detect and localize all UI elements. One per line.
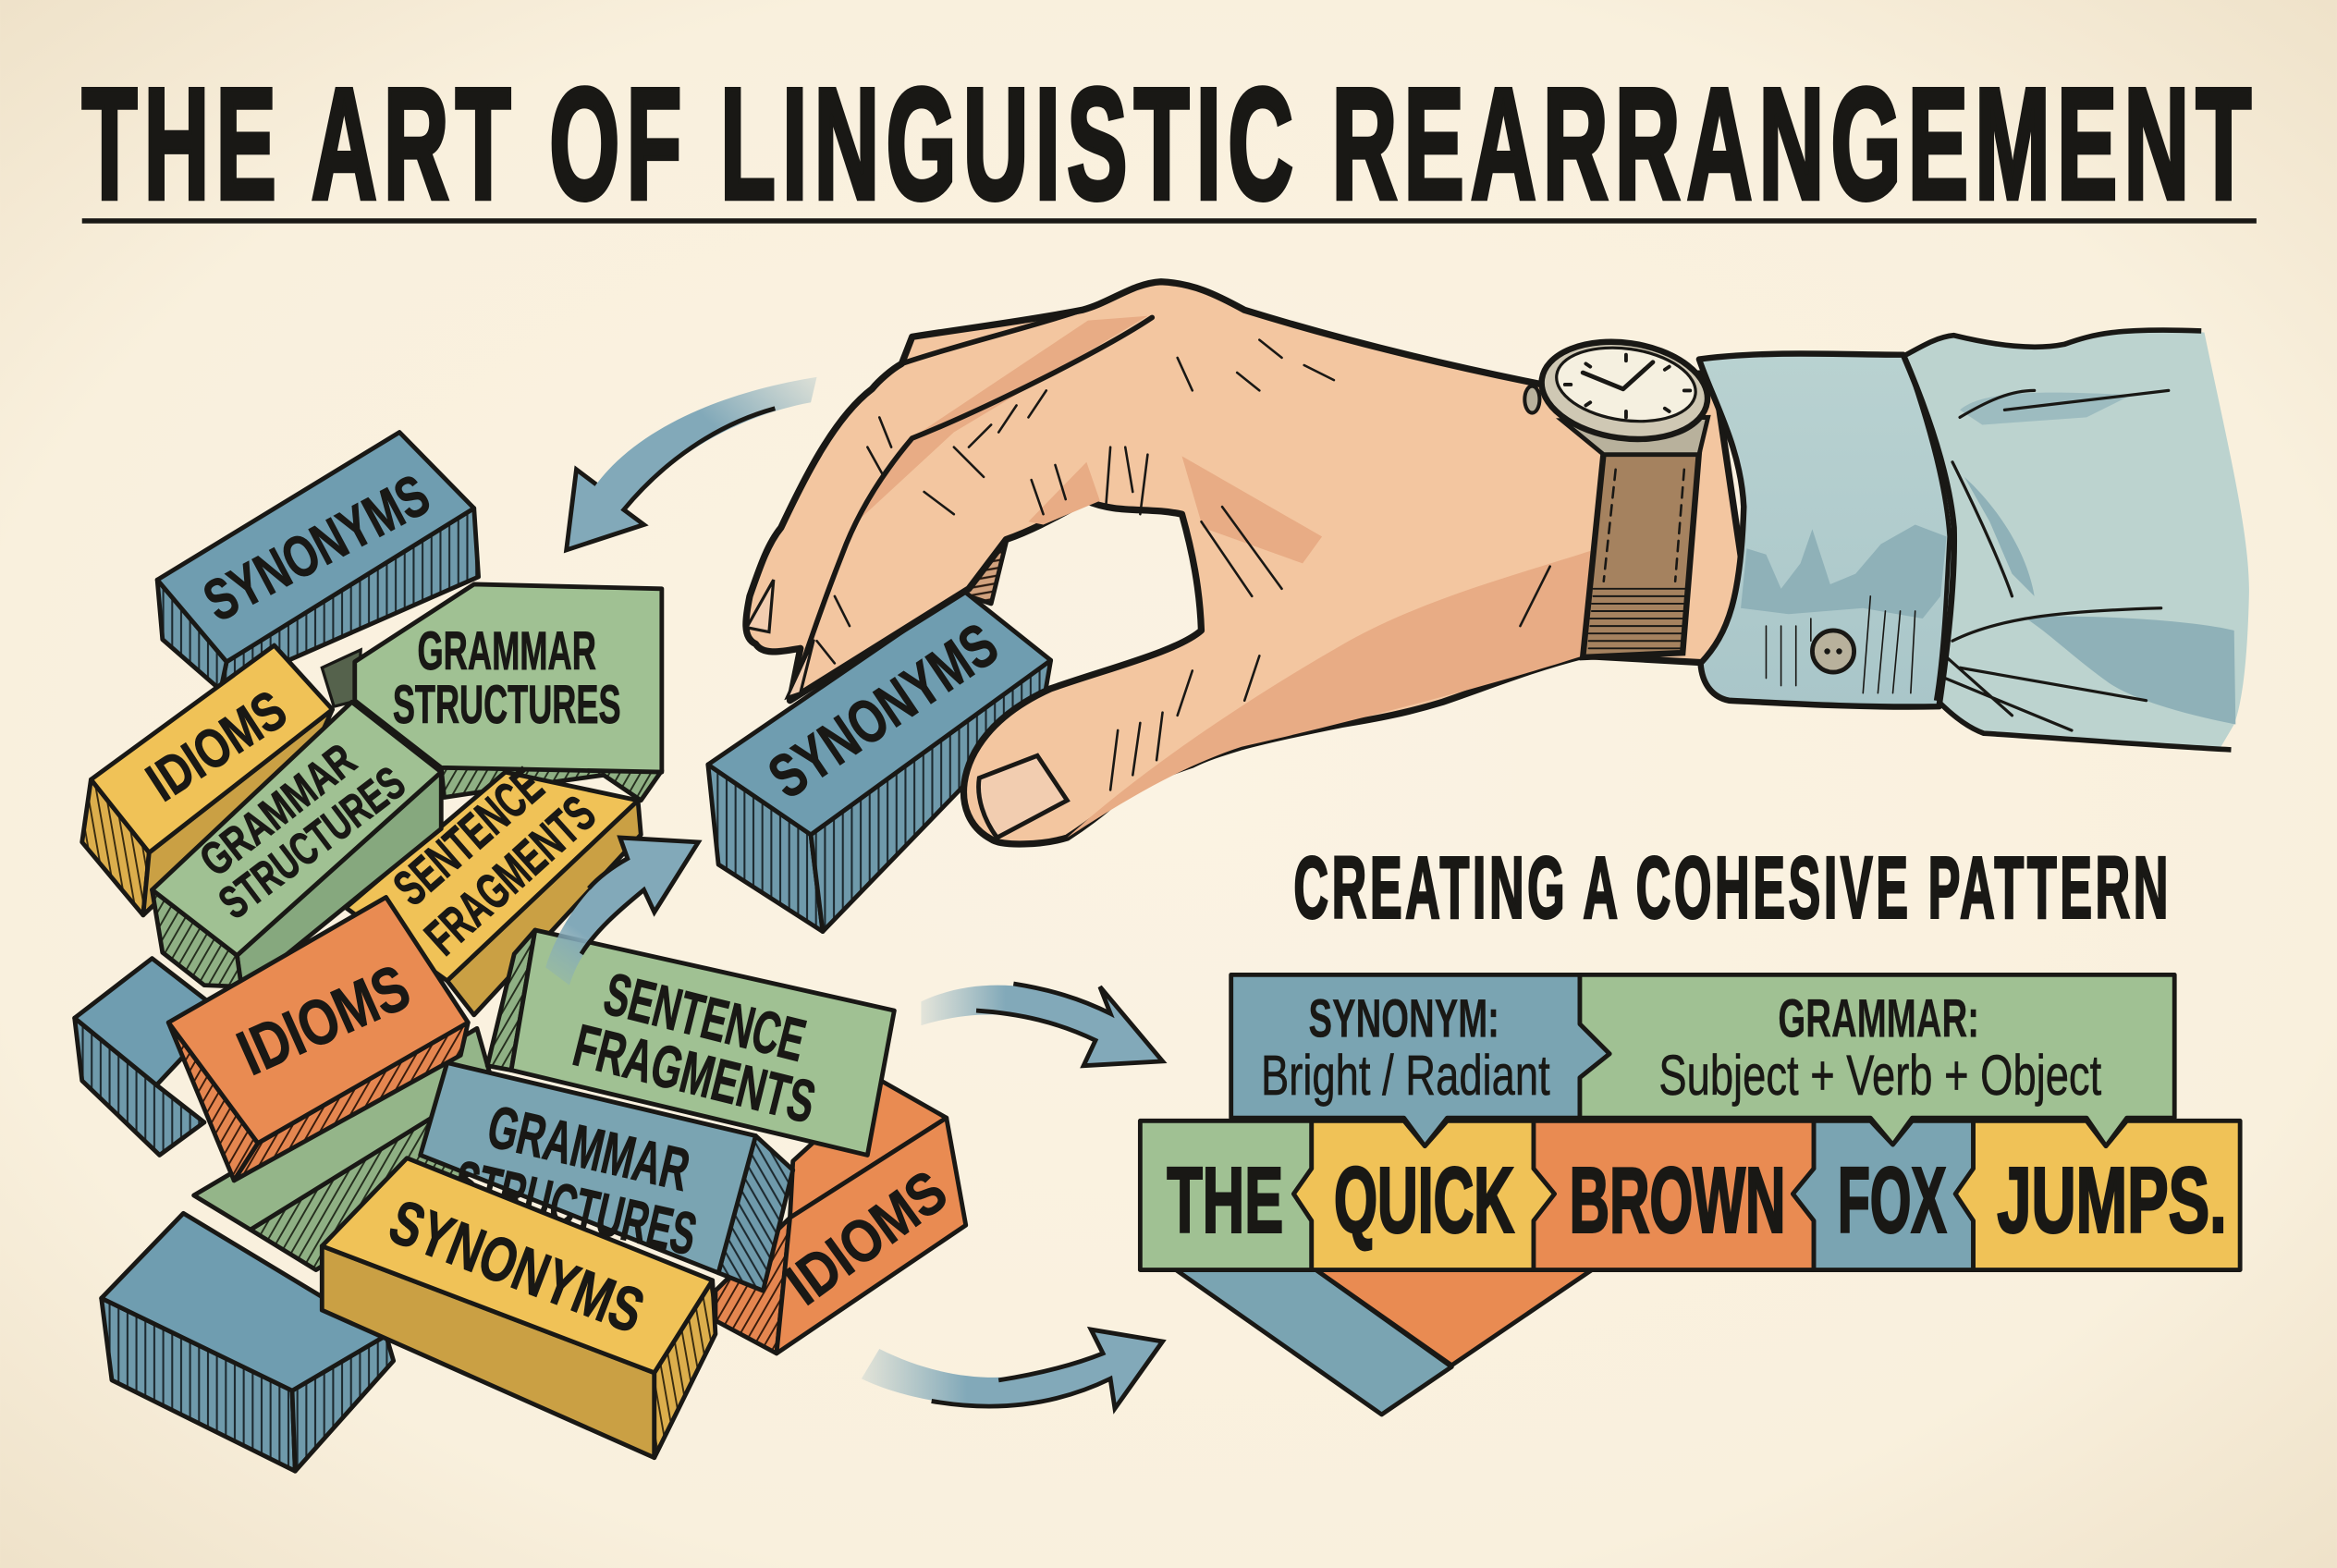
- block: held blue synonyms: [708, 590, 1051, 932]
- hand skin: [746, 282, 1747, 844]
- label: grammar structures: [448, 1093, 703, 1268]
- block: yellow synonyms: [322, 1158, 716, 1458]
- block: orange idioms: [168, 898, 468, 1181]
- label: sentence fragments: SENTENCE: [383, 756, 554, 916]
- word: quick: [1293, 1121, 1555, 1270]
- label: grammar structures: STRUCTURES: [393, 675, 621, 735]
- label: sentence fragments: SENTENCE: [598, 960, 812, 1074]
- callout: synonym: Bright / Radiant: [1261, 1044, 1550, 1107]
- block: top blue synonyms: [157, 433, 479, 690]
- callout: synonym: SYNONYM:: [1309, 988, 1499, 1048]
- watch case: [1536, 332, 1714, 449]
- label: sentence fragments: FRAGMENTS: [414, 785, 606, 966]
- block: lower green behind: [194, 1028, 499, 1270]
- arrow: pile to pattern upper: [921, 984, 1163, 1066]
- block: green grammar structures flat: [322, 584, 662, 801]
- word: fox: [1793, 1121, 1974, 1270]
- label: grammar structures: STRUCTURES: [210, 756, 414, 929]
- word: quick: QUICK: [1334, 1150, 1514, 1253]
- word: brown: [1534, 1121, 1814, 1270]
- word: brown: BROWN: [1570, 1150, 1785, 1253]
- word: fox: FOX: [1838, 1150, 1947, 1253]
- wristwatch: [1524, 332, 1714, 657]
- block: yellow sentence fragments: [346, 756, 641, 1015]
- label: grammar structures: GRAMMAR: [482, 1093, 695, 1204]
- block: blue grammar structures: [421, 1062, 793, 1291]
- label: grammar structures: STRUCTURES: [448, 1147, 703, 1268]
- word: jumps: JUMPS.: [1997, 1150, 2227, 1253]
- block: green grammar structures angled: [153, 702, 441, 991]
- word: jumps: [1955, 1121, 2240, 1270]
- label: synonyms: SYNONYMS: [380, 1187, 653, 1347]
- watch strap: [1583, 451, 1699, 657]
- label: sentence fragments: FRAGMENTS: [567, 1011, 822, 1135]
- block: green sentence fragments: [487, 930, 894, 1155]
- callout: synonym: [1231, 974, 1609, 1146]
- held block end strip: [947, 536, 1008, 604]
- block: blue bottom unlabelled: [102, 1213, 394, 1471]
- pattern diagram: [1140, 974, 2240, 1415]
- label: grammar structures: GRAMMAR: [417, 621, 596, 681]
- label: grammar structures: [393, 621, 621, 735]
- hand holding block: [708, 282, 2249, 932]
- block: yellow idioms: [82, 645, 333, 915]
- finger lines: [791, 310, 1152, 697]
- block: blue left unlabelled: [75, 959, 224, 1155]
- word: the: THE: [1167, 1150, 1283, 1253]
- label: idioms: IDIOMS: [774, 1158, 959, 1317]
- shirt cuff: [1699, 353, 1954, 706]
- thumb nail: [979, 755, 1067, 838]
- label: synonyms: SYNONYMS: [757, 610, 1010, 812]
- arrow: hand back to pile: [567, 377, 817, 550]
- lower chevron: orange: [1316, 1270, 1592, 1366]
- callout: grammar: GRAMMAR:: [1778, 988, 1979, 1048]
- shirt sleeve: [1903, 331, 2249, 750]
- arrow: pile upward: [545, 838, 698, 986]
- finger nails: [747, 580, 814, 697]
- label: grammar structures: GRAMMAR: [190, 733, 365, 887]
- label: synonyms: SYNONYMS: [193, 462, 440, 634]
- label: sentence fragments: [567, 960, 822, 1135]
- callout: grammar: [1580, 974, 2174, 1146]
- word: the: [1140, 1121, 1312, 1270]
- label: sentence fragments: [383, 756, 606, 966]
- label: idioms: IDIOMS: [136, 679, 297, 813]
- label: grammar structures: [190, 733, 414, 929]
- hand shadows: [857, 316, 1593, 838]
- callout: grammar: Subject + Verb + Object: [1658, 1044, 2101, 1107]
- lower chevron: blue: [1176, 1270, 1451, 1415]
- label: idioms: IDIOMS: [227, 950, 420, 1089]
- arrow: pile to pattern lower: [862, 1329, 1163, 1408]
- block: orange idioms right: [716, 1081, 966, 1354]
- cuff button: [1812, 631, 1854, 672]
